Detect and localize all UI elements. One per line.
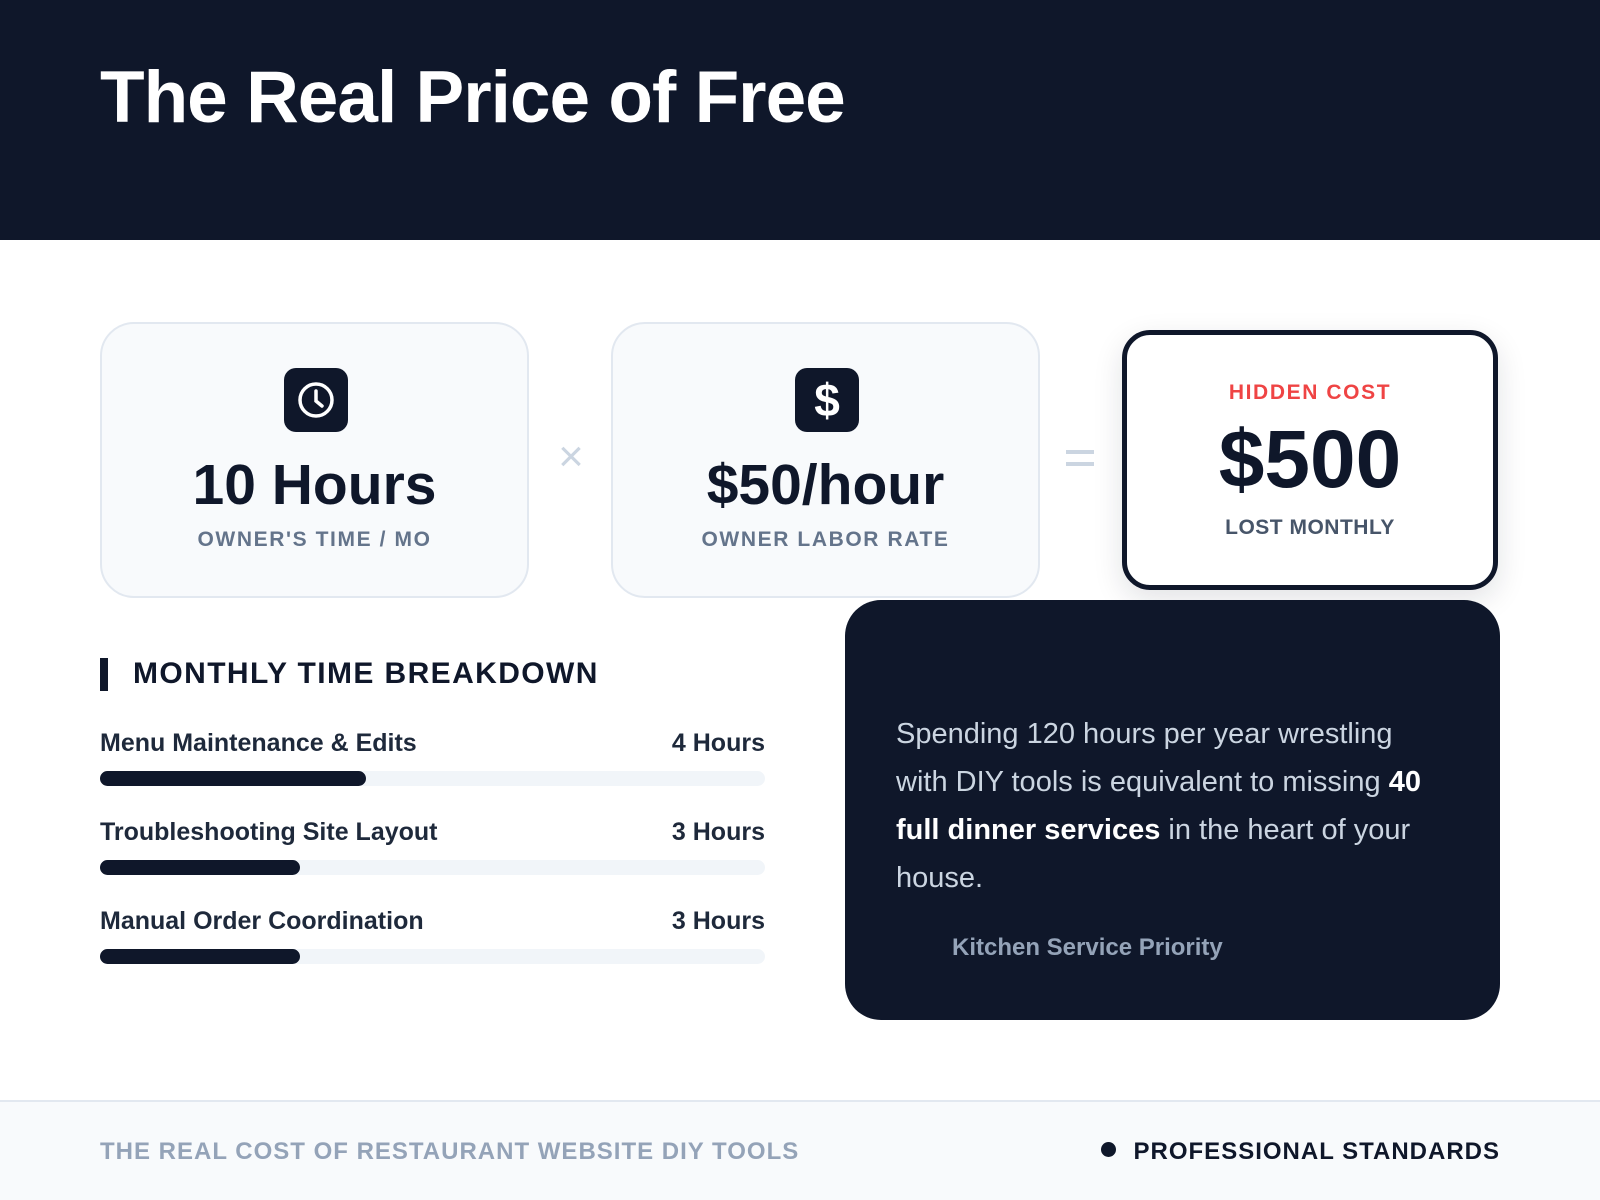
row: manual order bbox=[100, 907, 765, 964]
icon: dollar bbox=[795, 368, 859, 432]
footer bbox=[0, 1100, 1600, 1200]
card: rate bbox=[611, 322, 1040, 598]
quote text: Spending 120 hours per year wrestling with DIY tools is equivalent to missing 40 full dinner services in the heart of your house. bbox=[896, 718, 1421, 894]
row: menu maintenance bbox=[100, 729, 765, 786]
value: $500 bbox=[1219, 414, 1401, 505]
footer right badge: PROFESSIONAL STANDARDS bbox=[1134, 1138, 1500, 1165]
row: troubleshooting: 3 Hours bbox=[672, 818, 765, 846]
label: lost monthly: LOST MONTHLY bbox=[1225, 516, 1395, 539]
row: menu maintenance: 4 Hours bbox=[672, 729, 765, 757]
icon: dollar: $ bbox=[814, 374, 840, 426]
card: hidden cost bbox=[1122, 330, 1498, 590]
callout: dark quote panel bbox=[845, 600, 1500, 1020]
row: troubleshooting: Troubleshooting Site Layout bbox=[100, 818, 438, 846]
heading bbox=[100, 658, 108, 691]
header band bbox=[0, 0, 1600, 240]
title: The Real Price of Free bbox=[100, 57, 845, 138]
value: $50/hour bbox=[707, 453, 944, 517]
footer left text: THE REAL COST OF RESTAURANT WEBSITE DIY TOOLS bbox=[100, 1138, 799, 1165]
attribution: Kitchen Service Priority bbox=[952, 934, 1223, 961]
operator: multiply: × bbox=[558, 432, 584, 481]
value: 10 Hours bbox=[193, 453, 436, 517]
row: menu maintenance: Menu Maintenance & Edits bbox=[100, 729, 417, 757]
operator: equals bbox=[1066, 450, 1094, 466]
section: monthly time breakdown: MONTHLY TIME BREAKDOWN bbox=[133, 657, 599, 690]
card: hours bbox=[100, 322, 529, 598]
icon: clock bbox=[284, 368, 348, 432]
label: OWNER'S TIME / MO bbox=[197, 528, 432, 551]
label: hidden cost: HIDDEN COST bbox=[1229, 381, 1391, 404]
row: troubleshooting bbox=[100, 818, 765, 875]
label: OWNER LABOR RATE bbox=[701, 528, 950, 551]
row: manual order: 3 Hours bbox=[672, 907, 765, 935]
row: manual order: Manual Order Coordination bbox=[100, 907, 424, 935]
